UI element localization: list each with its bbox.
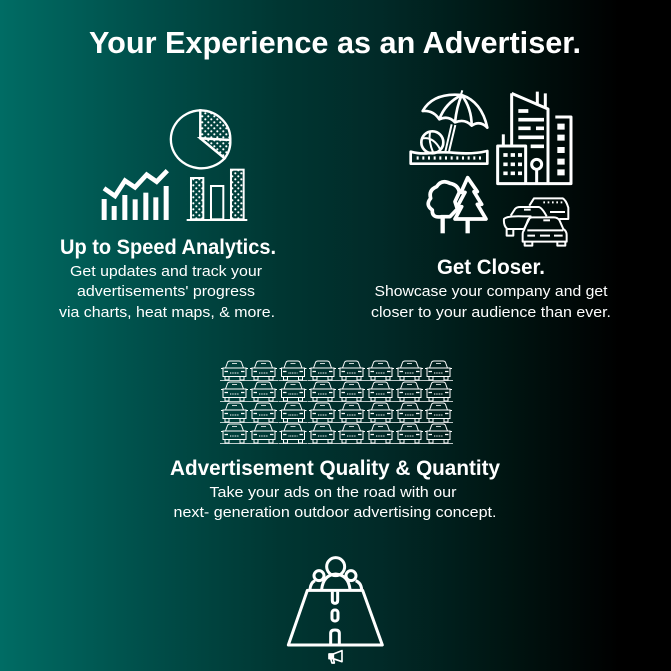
traffic cars bbox=[504, 198, 568, 246]
icon: grid of cars bbox=[220, 361, 453, 444]
text: quality description: next- generation outdoor advertising concept. bbox=[174, 505, 496, 521]
text: quality description: Take your ads on the road with our bbox=[210, 485, 457, 501]
road markings bbox=[331, 592, 339, 645]
audience bbox=[310, 558, 362, 589]
bar chart outline bbox=[187, 170, 247, 220]
text: get closer description bbox=[371, 284, 611, 321]
heading: analytics: Up to Speed Analytics. bbox=[60, 236, 276, 259]
title: Your Experience as an Advertiser. bbox=[89, 25, 581, 60]
text: analytics description bbox=[59, 264, 275, 321]
pie chart bbox=[171, 110, 230, 168]
icon: analytics charts bbox=[102, 110, 247, 220]
heading: get closer: Get Closer. bbox=[437, 256, 545, 279]
line and column chart bbox=[102, 171, 169, 220]
beach umbrella and ball bbox=[411, 90, 487, 164]
text: analytics description: Get updates and track your bbox=[70, 264, 262, 280]
road bbox=[288, 590, 382, 645]
icon: beach, city, trees and cars bbox=[411, 90, 571, 246]
trees bbox=[428, 178, 486, 233]
heading: advertisement quality: Advertisement Quality & Quantity bbox=[170, 457, 500, 480]
text: analytics description: advertisements' progress bbox=[77, 284, 255, 300]
text: quality description bbox=[174, 485, 496, 521]
icon: road with audience and megaphone bbox=[288, 558, 382, 663]
text: analytics description: via charts, heat maps, & more. bbox=[59, 305, 275, 321]
megaphone bbox=[329, 651, 342, 663]
text: get closer description: Showcase your company and get bbox=[374, 284, 608, 300]
text: get closer description: closer to your audience than ever. bbox=[371, 305, 611, 321]
city buildings bbox=[498, 92, 571, 184]
